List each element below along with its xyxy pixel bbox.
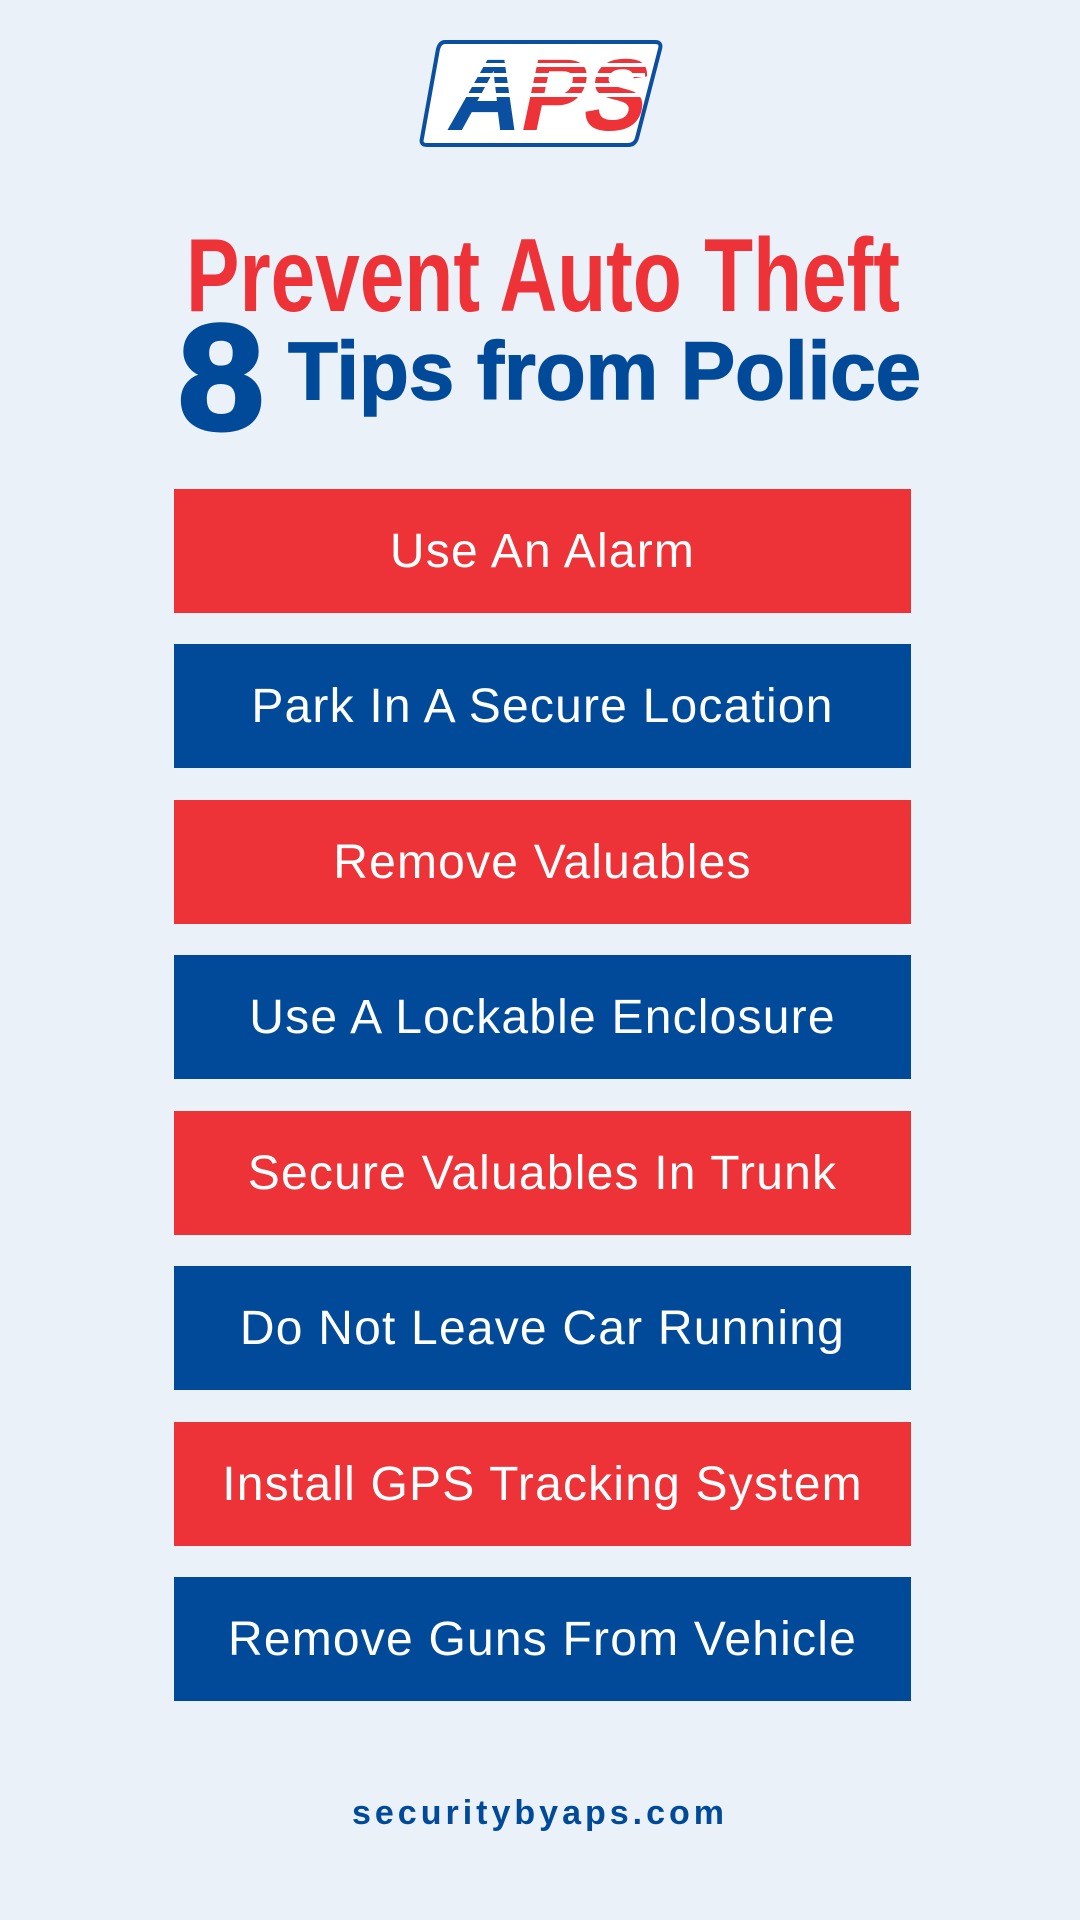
tip 3 bbox=[174, 800, 911, 924]
footer url: securitybyaps.com bbox=[352, 1794, 728, 1832]
tip 6: Do Not Leave Car Running bbox=[240, 1302, 845, 1354]
tip 8: Remove Guns From Vehicle bbox=[228, 1612, 857, 1666]
tip 7: Install GPS Tracking System bbox=[222, 1458, 863, 1510]
tip 5: Secure Valuables In Trunk bbox=[248, 1146, 837, 1200]
tip 5 bbox=[174, 1111, 911, 1235]
tip 3: Remove Valuables bbox=[333, 836, 752, 888]
tip 2 bbox=[174, 644, 911, 768]
tip 8 bbox=[174, 1577, 911, 1701]
tip 1 bbox=[174, 489, 911, 613]
title bbox=[178, 218, 921, 440]
logo: A bbox=[440, 38, 537, 151]
tip 1: Use An Alarm bbox=[390, 524, 695, 578]
tip 7 bbox=[174, 1422, 911, 1546]
tip 6 bbox=[174, 1266, 911, 1390]
tip 4: Use A Lockable Enclosure bbox=[249, 990, 836, 1044]
logo bbox=[420, 38, 662, 151]
heading: Tips from Police: Tips from Police bbox=[288, 326, 921, 417]
tip 2: Park In A Secure Location bbox=[251, 680, 834, 732]
tip 4 bbox=[174, 955, 911, 1079]
